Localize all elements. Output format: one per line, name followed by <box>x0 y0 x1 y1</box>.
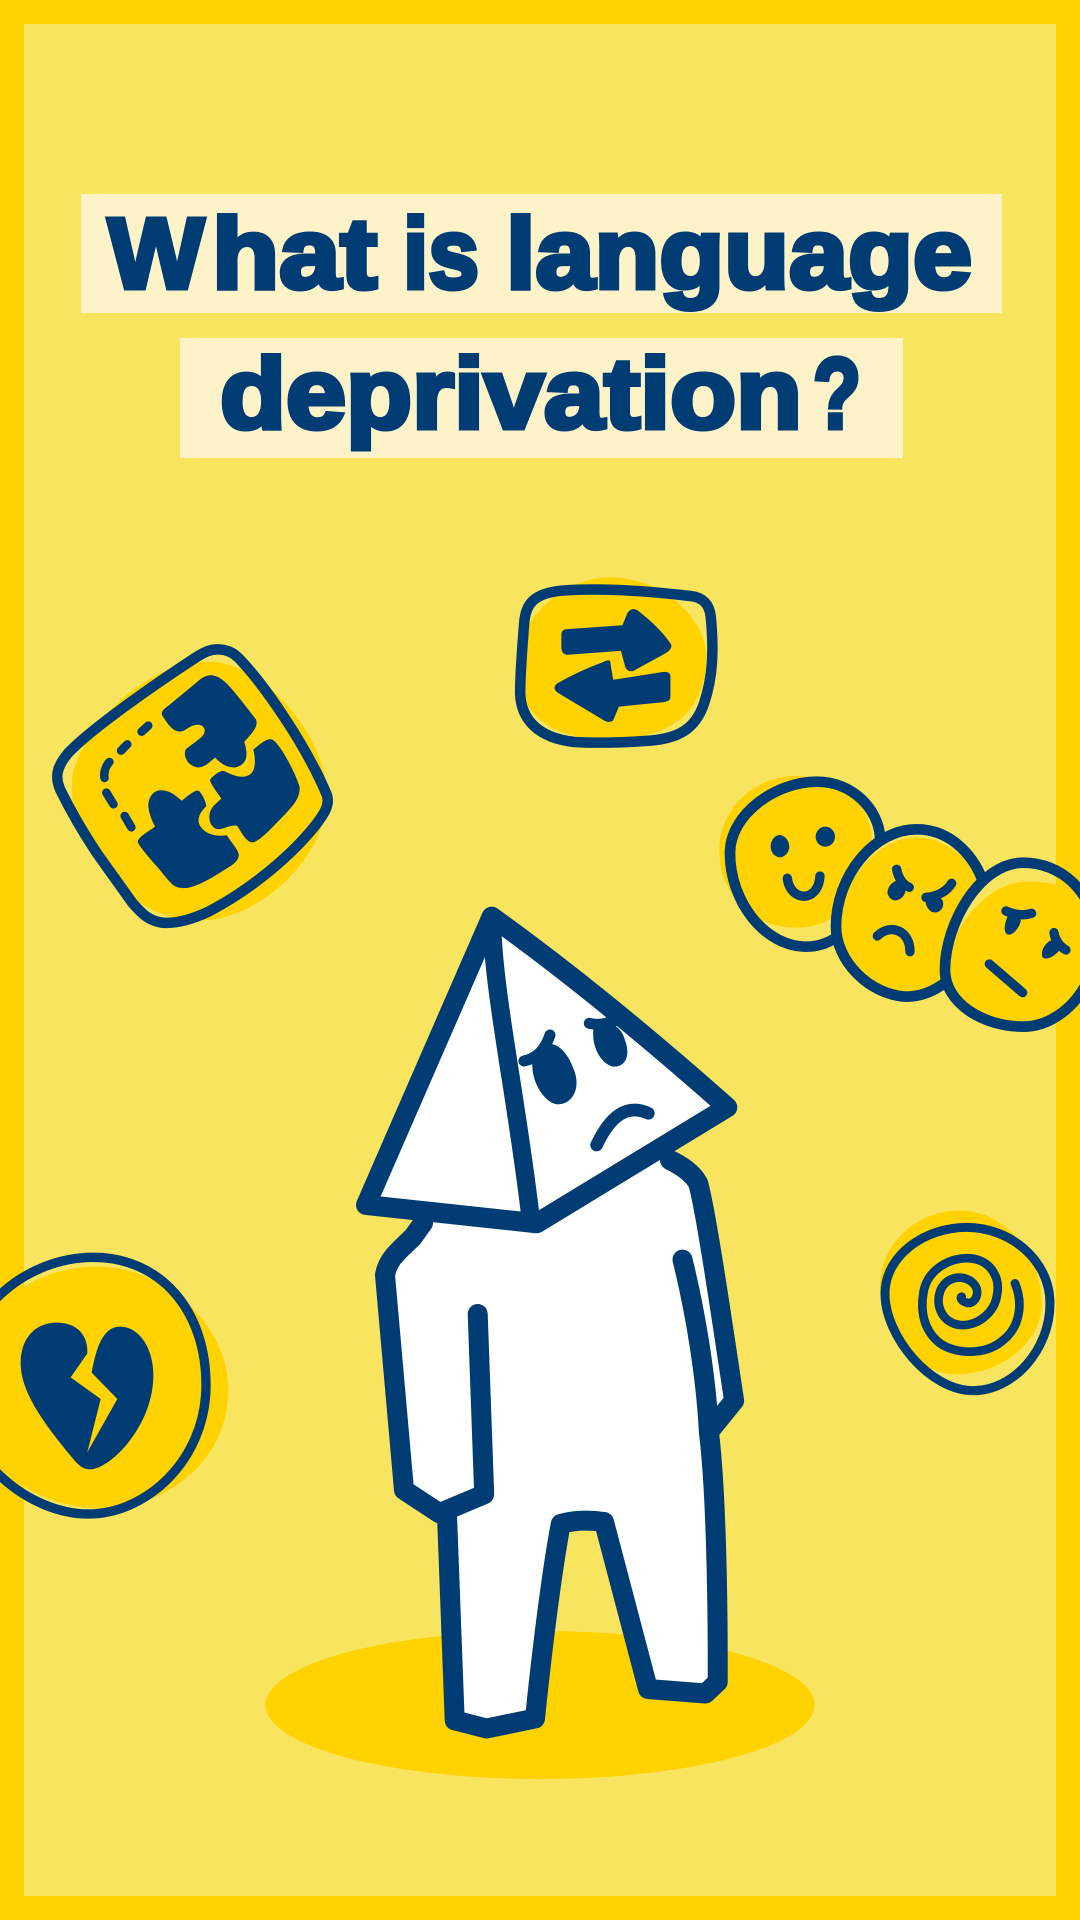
title <box>81 194 1002 458</box>
title: hat <box>212 198 377 310</box>
ground shadow <box>265 1631 815 1779</box>
title: language <box>506 198 972 310</box>
face: angry <box>836 829 985 997</box>
face: sad expression <box>524 1018 648 1145</box>
title: ? <box>813 338 861 450</box>
icon: swap arrows <box>516 577 712 743</box>
title: deprivation <box>220 338 802 450</box>
icon: puzzle pieces <box>57 649 328 923</box>
face: smiling <box>719 776 880 947</box>
title: W <box>108 198 205 310</box>
icon: spiral <box>880 1211 1050 1391</box>
icon: broken heart <box>0 1257 228 1514</box>
title: is <box>403 198 479 310</box>
icon: three emotion faces <box>719 776 1080 1027</box>
character: body <box>385 1150 734 1728</box>
character: cone head <box>366 917 727 1223</box>
face: annoyed <box>945 863 1080 1027</box>
